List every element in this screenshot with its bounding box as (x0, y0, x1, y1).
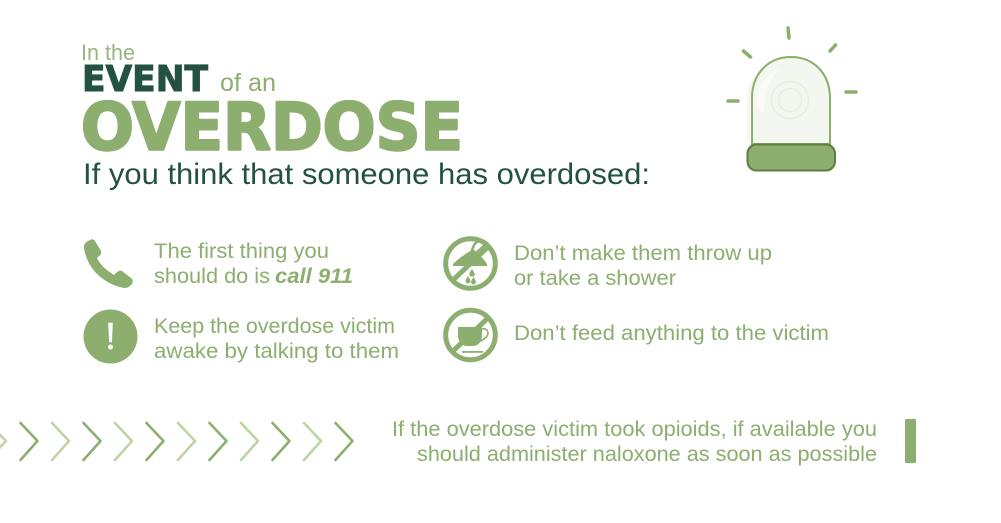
title: EVENT (82, 59, 208, 100)
text: call 911 (154, 240, 353, 288)
chevron arrows (0, 423, 352, 460)
text: naloxone (392, 418, 877, 466)
text: naloxone: should administer naloxone as soon as possible (417, 443, 877, 466)
icon: no food (446, 310, 495, 360)
text: call 911: The first thing you (154, 240, 329, 263)
text: no feeding: Don’t feed anything to the victim (514, 322, 829, 345)
icon: no shower (446, 239, 495, 288)
subtitle: If you think that someone has overdosed: (83, 158, 650, 191)
icon: phone (84, 239, 133, 288)
text: no vomiting or shower (514, 242, 772, 290)
text: no vomiting or shower: Don’t make them throw up (514, 242, 772, 265)
title: In the (81, 40, 135, 65)
text: keep awake: awake by talking to them (154, 340, 399, 363)
title: OVERDOSE (81, 90, 463, 166)
accent bar (905, 419, 916, 463)
text: call 911: should do is (154, 265, 270, 288)
text: call 911: call 911 (275, 265, 353, 288)
icon: exclamation (84, 310, 138, 364)
title: of an (220, 69, 276, 97)
text: no vomiting or shower: or take a shower (514, 267, 676, 290)
title (81, 40, 463, 166)
text: naloxone: If the overdose victim took opioids, if available you (392, 418, 877, 441)
text: keep awake: Keep the overdose victim (154, 315, 395, 338)
icon: siren (728, 28, 856, 170)
text: keep awake (154, 315, 399, 363)
